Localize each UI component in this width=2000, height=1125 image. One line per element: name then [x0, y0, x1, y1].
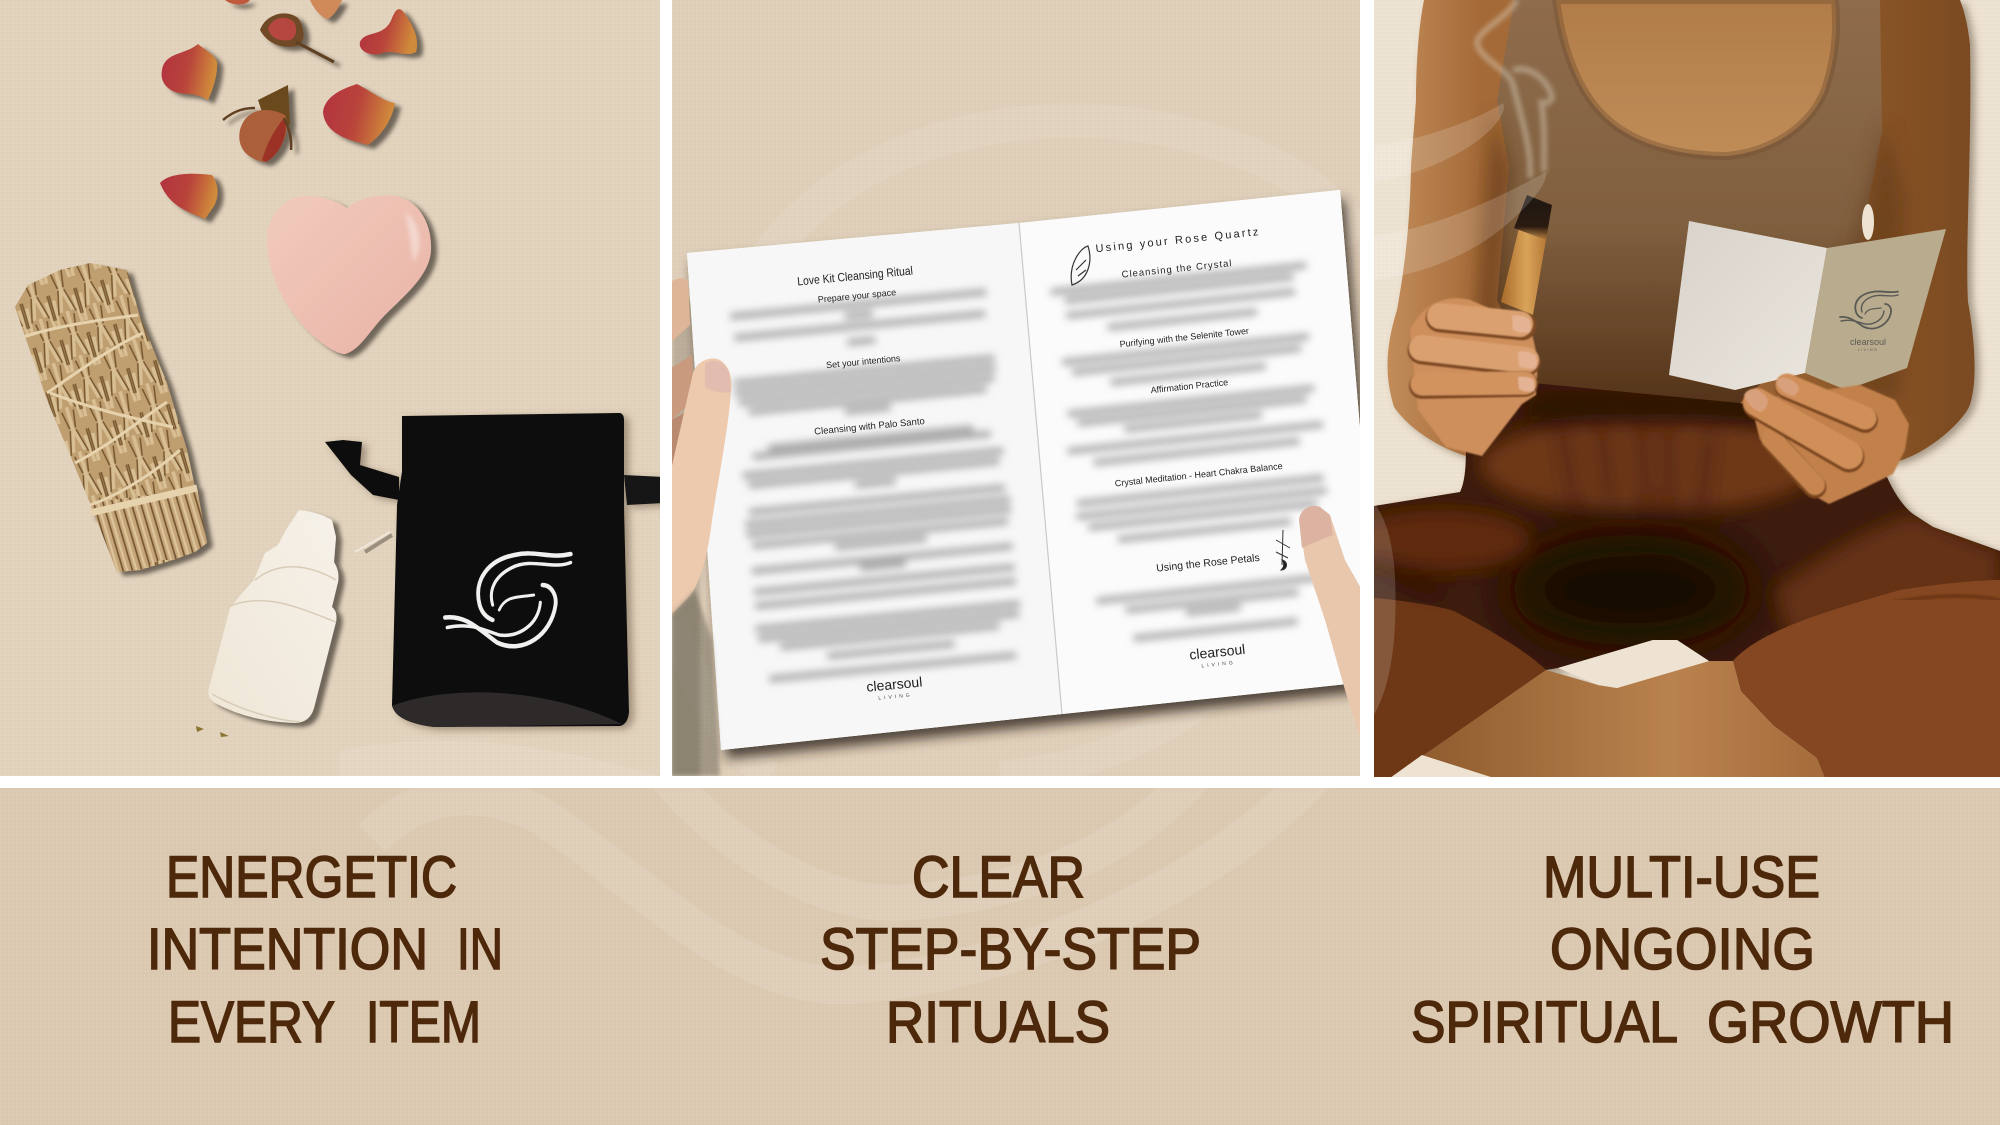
caption: clear rituals: CLEAR: [912, 845, 1085, 910]
caption: spiritual growth: [1411, 845, 1954, 1055]
meditation heading: Crystal Meditation - Heart Chakra Balance: [1114, 461, 1283, 488]
caption: clear rituals: RITUALS: [886, 990, 1110, 1055]
smoke wisp: [1477, 0, 1552, 178]
black pouch: [325, 413, 664, 727]
arm gap: [1862, 204, 1874, 240]
left page blurred text: [722, 256, 1028, 713]
booklet inner page: [1669, 221, 1827, 390]
intentions heading: Set your intentions: [826, 353, 901, 370]
caption: energetic intention: ENERGETIC: [166, 845, 457, 910]
crossed legs: [1390, 661, 1825, 778]
selenite heading: Purifying with the Selenite Tower: [1119, 326, 1249, 349]
pants: [1350, 380, 2000, 780]
left page brand: clearsoul: [866, 673, 923, 695]
caption: spiritual growth: ONGOING: [1550, 917, 1815, 982]
cover brand sub: LIVING: [1858, 348, 1878, 352]
caption: spiritual growth: GROWTH: [1707, 990, 1954, 1055]
left page: [687, 223, 1062, 750]
crystal heading: Cleansing the Crystal: [1121, 258, 1233, 281]
prepare heading: Prepare your space: [817, 287, 896, 305]
right hand: [1299, 506, 1362, 745]
sage bundle: [15, 263, 207, 572]
upper body skin: [1388, 0, 1975, 462]
shadow beside booklet: [672, 300, 700, 776]
caption: energetic intention: EVERY: [168, 990, 335, 1055]
right page heading: Using your Rose Quartz: [1095, 226, 1261, 255]
tank top: [1470, 0, 1905, 403]
cover brand: clearsoul: [1850, 337, 1886, 347]
tiny herb flecks: [196, 726, 229, 737]
panel: ritual booklet: [671, 0, 1366, 776]
palo santo heading: Cleansing with Palo Santo: [814, 416, 925, 438]
right page: [1019, 190, 1366, 714]
selenite tower: [208, 510, 338, 723]
panel: caption band: [0, 770, 2000, 1125]
band swirl watermark: [372, 770, 1320, 985]
icon: crystal sketch: [1071, 246, 1090, 285]
caption: energetic intention: [147, 845, 503, 1055]
left hand: [671, 278, 732, 776]
booklet back cover: [1805, 229, 1946, 390]
left page brand sub: LIVING: [878, 692, 913, 702]
swirl watermark over figure: [1374, 103, 1546, 715]
held booklet: [1669, 221, 1946, 390]
caption: clear rituals: [820, 845, 1201, 1055]
left hand holding stick: [1410, 298, 1538, 456]
rose quartz heart: [267, 195, 431, 354]
right hand holding booklet: [1744, 378, 1909, 504]
background swirl watermark: [672, 121, 1360, 776]
caption: energetic intention: IN: [457, 917, 503, 982]
caption: energetic intention: INTENTION: [147, 917, 428, 982]
right page brand sub: LIVING: [1201, 660, 1236, 669]
right page blurred text: [1046, 222, 1347, 681]
chest: [1556, 0, 1836, 156]
pouch logo: [445, 553, 571, 646]
icon: moon sprig: [1276, 530, 1290, 570]
caption: spiritual growth: SPIRITUAL: [1411, 990, 1678, 1055]
affirmation heading: Affirmation Practice: [1150, 377, 1229, 395]
left page heading: Love Kit Cleansing Ritual: [797, 263, 913, 289]
seated figure: [1350, 0, 2000, 780]
dried rose petals: [160, 0, 417, 219]
panel: woman reading booklet: [1350, 0, 2000, 780]
gap between legs: [1558, 640, 1709, 688]
caption: clear rituals: STEP-BY-STEP: [820, 917, 1201, 982]
caption: energetic intention: ITEM: [366, 990, 481, 1055]
petals heading: Using the Rose Petals: [1156, 552, 1260, 575]
caption: spiritual growth: MULTI-USE: [1543, 845, 1820, 910]
open booklet: [687, 190, 1366, 750]
palo santo stick: [1501, 195, 1552, 315]
right page brand: clearsoul: [1189, 641, 1246, 663]
cover logo: [1840, 291, 1898, 329]
panel: kit items: [0, 0, 664, 776]
